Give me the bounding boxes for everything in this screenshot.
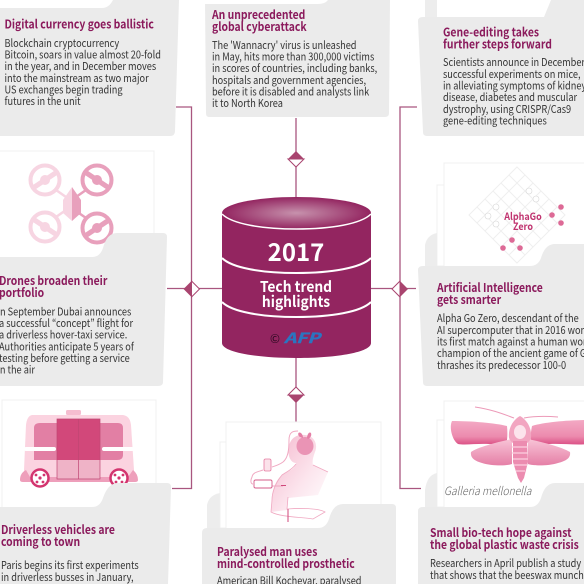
body text: in May, hits more than 300,000 victims	[212, 48, 375, 64]
connector lines	[167, 107, 421, 488]
panel: digital currency	[0, 0, 179, 136]
body text: dystrophy, using CRISPR/Cas9	[443, 100, 571, 116]
icon: wax moth	[425, 401, 584, 513]
body text: AI supercomputer that in 2016 won	[437, 321, 584, 337]
heading: Paralysed man uses	[217, 543, 318, 560]
board label: AlphaGo	[503, 208, 542, 223]
heading: Gene-editing takes	[443, 24, 539, 41]
species label: Galleria mellonella	[444, 482, 532, 499]
body text: In September Dubai announces	[0, 303, 132, 319]
heading: further steps forward	[443, 36, 552, 53]
body text: Bitcoin, soars in value almost 20-fold	[4, 46, 161, 62]
icon: mind-controlled prosthetic	[207, 422, 381, 534]
body text: Blockchain cryptocurrency	[4, 34, 120, 50]
central cylinder	[222, 197, 371, 358]
body text: into the mainstream as two major	[4, 69, 149, 85]
connector diamond: bottom	[288, 387, 304, 403]
connector diamond: right	[392, 281, 408, 297]
body text: a driverless hover-taxi service.	[0, 326, 127, 342]
AFP credit: ©	[270, 330, 280, 347]
year: 2017	[268, 233, 324, 268]
body text: it to North Korea	[212, 94, 283, 110]
heading: Driverless vehicles are	[1, 521, 115, 538]
heading: portfolio	[0, 284, 44, 301]
heading: gets smarter	[437, 291, 501, 308]
body text: futures in the unit	[4, 92, 81, 108]
panel: drones	[0, 233, 167, 386]
icon: AlphaGo Zero board	[425, 163, 584, 273]
body text: Scientists announce in December	[443, 53, 584, 69]
body text: Paris begins its first experiments	[1, 556, 139, 572]
body text: before it is disabled and analysts link	[212, 83, 370, 99]
panel: gene editing	[418, 0, 584, 136]
body text: The 'Wannacry' virus is unleashed	[212, 36, 356, 52]
heading: coming to town	[1, 533, 80, 550]
body text: Researchers in April publish a study	[430, 554, 582, 570]
heading: global cyberattack	[212, 18, 307, 35]
cylinder title: Tech trend	[260, 275, 332, 297]
cylinder title: highlights	[262, 290, 330, 312]
body text: US exchanges begin trading	[4, 81, 123, 97]
body text: thrashes its predecessor 100-0	[437, 356, 567, 372]
panel: prosthetic	[202, 504, 396, 584]
heading: Drones broaden their	[0, 272, 107, 289]
panel: driverless vehicles	[0, 483, 171, 584]
connector diamond: top	[288, 151, 304, 167]
body text: disease, diabetes and muscular	[443, 88, 577, 104]
body text: in the year, and in December moves	[4, 57, 156, 73]
connector diamond: left	[184, 281, 200, 297]
body text: testing before getting a service	[0, 349, 130, 365]
body text: in alleviating symptoms of kidney	[443, 77, 584, 93]
body text: gene-editing techniques	[443, 112, 547, 128]
heading: Artificial Intelligence	[436, 279, 543, 296]
icon: driverless bus	[2, 400, 156, 510]
AFP credit: AFP	[283, 328, 324, 348]
panel: plastic waste	[418, 483, 584, 584]
heading: Small bio-tech hope against	[430, 524, 572, 541]
heading: mind-controlled prosthetic	[217, 555, 355, 572]
body text: hospitals and government agencies,	[212, 71, 366, 87]
body text: successful experiments on mice,	[443, 65, 581, 81]
body text: in scores of countries, including banks,	[212, 59, 377, 75]
panel: artificial intelligence	[418, 244, 584, 386]
body text: Authorities anticipate 5 years of	[0, 338, 134, 354]
board label: Zero	[513, 218, 533, 233]
icon: drone	[0, 151, 154, 271]
panel: cyberattack	[205, 0, 390, 117]
body text: a successful “concept” flight for	[0, 314, 133, 330]
heading: An unprecedented	[211, 6, 305, 23]
heading: the global plastic waste crisis	[430, 536, 579, 553]
heading: Digital currency goes ballistic	[4, 16, 154, 33]
body text: in driverless busses in January,	[1, 568, 134, 584]
AFP credit	[270, 328, 324, 348]
body text: Alpha Go Zero, descendant of the	[437, 309, 579, 325]
